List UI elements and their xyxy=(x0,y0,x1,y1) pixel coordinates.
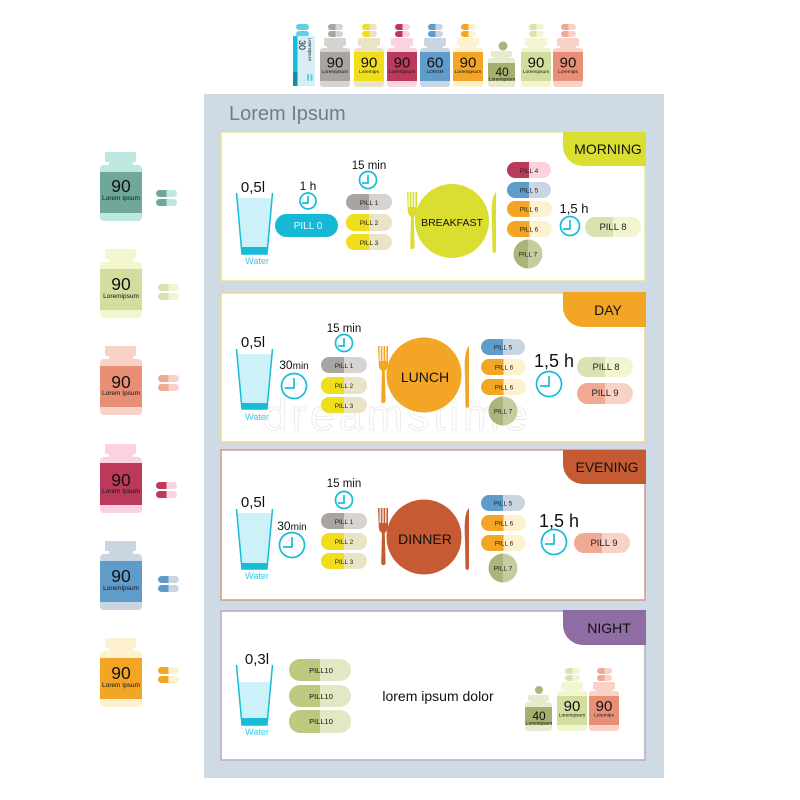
bottle: salmon 90: 90 xyxy=(596,698,612,715)
bottle: olive 40: Loremipsum xyxy=(526,720,552,726)
pills 1 to 3: PILL 2 xyxy=(335,539,354,546)
bottle: blue 60: 60 xyxy=(427,54,443,72)
pills 10: PILL10 xyxy=(309,717,333,726)
clock: 30 min: 30min xyxy=(277,519,307,533)
tab: night xyxy=(563,610,646,645)
pills 10 xyxy=(289,659,351,733)
pills 4 to 7 xyxy=(507,162,552,268)
bottle: yellow 90 xyxy=(354,24,384,87)
pills 10: PILL10 xyxy=(309,692,333,701)
bottle: grey 90 xyxy=(320,24,350,87)
bottle: salmon 90 xyxy=(589,668,619,731)
left bottle: crimson: 90 xyxy=(111,470,131,490)
pills 5 to 7: PILL 6 xyxy=(495,364,514,372)
pills 1 to 3: PILL 1 xyxy=(360,200,379,207)
main background panel xyxy=(204,94,664,778)
pill 0: PILL 0 xyxy=(294,221,323,232)
left bottle: teal: 90 xyxy=(111,176,131,196)
left bottle: blue: Loremipsum xyxy=(103,585,139,592)
left bottle: orange: 90 xyxy=(111,663,131,683)
clock: 30 min xyxy=(279,358,309,398)
left bottle: lime: 90 xyxy=(111,274,131,294)
box bottle: 30: 30 xyxy=(297,40,307,50)
panel: morning xyxy=(221,132,646,281)
pills 4 to 7: PILL 4 xyxy=(520,168,539,175)
clock: 1,5 h: 1,5 h xyxy=(539,511,579,531)
left bottle: crimson xyxy=(100,444,177,513)
bottle: grey 90: Loremipsum xyxy=(322,69,348,75)
clock: 15 min xyxy=(352,160,386,188)
clock: 1 h xyxy=(300,179,316,209)
pills 4 to 7: PILL 5 xyxy=(520,188,539,194)
plate: lunch xyxy=(378,338,469,412)
panel: day xyxy=(221,292,646,442)
water glass xyxy=(236,334,272,422)
plate: dinner: DINNER xyxy=(398,531,452,547)
text: lorem ipsum dolor: lorem ipsum dolor xyxy=(382,688,494,704)
pills 5 to 7: PILL 6 xyxy=(495,384,514,392)
left bottle: salmon xyxy=(100,346,179,415)
pill 8: PILL 8 xyxy=(599,222,627,233)
clock: 1,5 h: 1,5 h xyxy=(560,201,588,216)
pills 1 to 3: PILL 3 xyxy=(335,403,354,410)
pills 1 to 3: PILL 3 xyxy=(335,559,354,566)
tab: morning: MORNING xyxy=(574,141,642,157)
pills 4 to 7: PILL 6 xyxy=(520,226,539,234)
clock: 15 min: 15 min xyxy=(327,478,361,490)
water glass: Water xyxy=(245,412,269,422)
pills 4 to 7: PILL 6 xyxy=(520,206,539,214)
bottle: olive 40: 40 xyxy=(532,709,546,723)
box bottle: 30 xyxy=(293,24,315,86)
water glass: 0,3l xyxy=(245,651,269,668)
bottle: orange 90: 90 xyxy=(460,54,476,72)
bottle: olive 40: Loremipsum xyxy=(489,76,515,82)
bottle: salmon 90: Loremips xyxy=(558,69,578,75)
left bottle: blue xyxy=(100,541,179,610)
pill 9 xyxy=(574,533,630,553)
tab: evening xyxy=(563,450,646,484)
clock: 1,5 h xyxy=(560,201,588,236)
bottle: lime 90 xyxy=(521,24,551,87)
watermark: dreamstime xyxy=(263,391,528,440)
bottle: lime 90: Loremipsum xyxy=(559,712,585,718)
panel: evening xyxy=(221,450,646,600)
clock: 15 min xyxy=(327,478,361,508)
clock: 15 min: 15 min xyxy=(327,323,361,335)
pills 1 to 3 xyxy=(346,194,392,250)
plate: lunch: LUNCH xyxy=(401,369,449,385)
pills 5 to 7 xyxy=(481,495,526,582)
bottle: salmon 90 xyxy=(553,24,583,87)
water glass xyxy=(236,179,272,266)
clock: 15 min xyxy=(327,323,361,352)
plate: breakfast: BREAKFAST xyxy=(421,217,484,229)
pills 5 to 7: PILL 5 xyxy=(494,500,513,508)
bottle: lime 90 xyxy=(557,668,587,731)
bottle: crimson 90 xyxy=(387,24,417,87)
pills 4 to 7: PILL 7 xyxy=(519,252,538,258)
panel: night xyxy=(221,610,646,760)
tab: morning xyxy=(563,132,646,166)
pill 0 xyxy=(275,214,338,237)
clock: 1,5 h xyxy=(534,351,574,396)
clock: 1,5 h xyxy=(539,511,579,554)
left bottle: orange xyxy=(100,638,179,707)
water glass: Water xyxy=(245,727,269,737)
pills 1 to 3: PILL 3 xyxy=(360,240,379,247)
bottle: yellow 90: 90 xyxy=(361,54,377,72)
pills 1 to 3: PILL 2 xyxy=(360,220,379,227)
left bottle: blue: 90 xyxy=(111,566,131,586)
left bottle: salmon: 90 xyxy=(111,372,131,392)
bottle: blue 60 xyxy=(420,24,450,87)
clock: 15 min: 15 min xyxy=(352,160,386,172)
bottle: salmon 90: Loremips xyxy=(594,712,614,718)
top row of bottles xyxy=(293,24,583,87)
tab: day: DAY xyxy=(594,302,623,318)
pill 8 xyxy=(585,217,641,237)
pills 5 to 7: PILL 6 xyxy=(495,540,514,548)
pills 8 and 9 xyxy=(577,357,633,404)
bottle: olive 40: 40 xyxy=(495,65,509,79)
water glass xyxy=(236,651,272,737)
bottle: orange 90 xyxy=(453,24,483,87)
pills 1 to 3 xyxy=(321,513,367,569)
bottle: grey 90: 90 xyxy=(327,54,343,72)
pills 8 and 9: PILL 9 xyxy=(591,388,619,399)
bottle: olive 40 xyxy=(488,42,515,87)
bottle: lime 90: Loremipsum xyxy=(523,69,549,75)
pills 8 and 9: PILL 8 xyxy=(592,362,620,373)
left bottle: lime: Loremipsum xyxy=(103,293,139,300)
bottle: salmon 90: 90 xyxy=(560,54,576,72)
pills 1 to 3: PILL 2 xyxy=(335,383,354,390)
clock: 30 min: 30min xyxy=(279,358,309,372)
pills 5 to 7: PILL 6 xyxy=(495,520,514,528)
pills 1 to 3 xyxy=(321,357,367,413)
clock: 1,5 h: 1,5 h xyxy=(534,351,574,371)
title: Lorem Ipsum xyxy=(229,103,346,125)
bottle: lime 90: 90 xyxy=(564,698,580,715)
tab: day xyxy=(563,292,646,327)
water glass: 0,5l xyxy=(241,334,265,351)
pills 5 to 7: PILL 7 xyxy=(494,408,513,416)
water glass: Water xyxy=(245,571,269,581)
bottle: yellow 90: Loremips xyxy=(359,69,379,75)
bottle: blue 60: LOREM xyxy=(426,69,444,75)
bottle: crimson 90: 90 xyxy=(394,54,410,72)
water glass xyxy=(236,494,272,581)
pills 10: PILL10 xyxy=(309,666,333,675)
bottle: olive 40 xyxy=(525,686,552,731)
bottle: lime 90: 90 xyxy=(528,54,544,72)
plate: breakfast xyxy=(407,184,496,258)
pills 5 to 7 xyxy=(481,339,526,426)
bottle: crimson 90: Loremipsum xyxy=(389,69,415,75)
left bottle: orange: Lorem Ipsum xyxy=(102,682,140,689)
pill 9: PILL 9 xyxy=(590,538,618,549)
left bottle: crimson: Lorem Ipsum xyxy=(102,488,140,495)
left bottle: teal xyxy=(100,152,177,221)
left column of bottles xyxy=(100,152,179,707)
water glass: 0,5l xyxy=(241,494,265,511)
tab: night: NIGHT xyxy=(587,620,631,636)
water glass: Water xyxy=(245,256,269,266)
pills 5 to 7: PILL 7 xyxy=(494,566,513,572)
left bottle: lime xyxy=(100,249,179,318)
clock: 30 min xyxy=(277,519,307,558)
pills 1 to 3: PILL 1 xyxy=(335,519,354,526)
water glass: 0,5l xyxy=(241,179,265,196)
pills 1 to 3: PILL 1 xyxy=(335,363,354,370)
left bottle: teal: Lorem Ipsum xyxy=(102,195,140,202)
box bottle: 30: Loremipsum xyxy=(308,38,312,62)
clock: 1 h: 1 h xyxy=(300,179,316,193)
left bottle: salmon: Lorem Ipsum xyxy=(102,390,140,397)
bottle: orange 90: Loremipsum xyxy=(455,69,481,75)
plate: dinner xyxy=(378,500,469,574)
pills 5 to 7: PILL 5 xyxy=(494,344,513,352)
tab: evening: EVENING xyxy=(575,459,639,475)
